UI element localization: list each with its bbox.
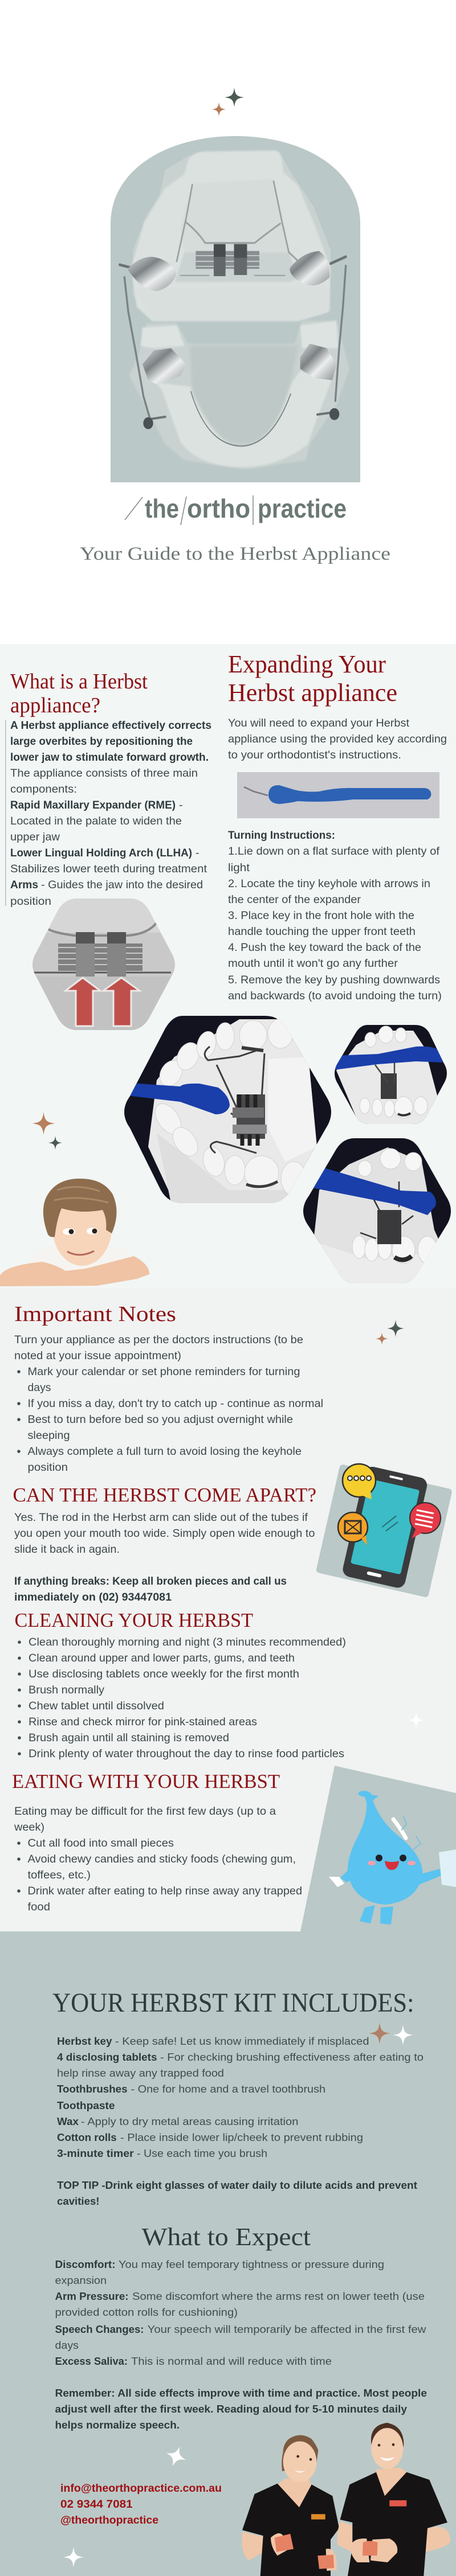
text block: notes list: sleeping	[27, 1429, 70, 1442]
logo: the ortho practice: practice	[258, 494, 347, 523]
heading: CAN THE HERBST COME APART?	[13, 1484, 316, 1506]
photo: expander close-up with arrows	[28, 899, 179, 1031]
icon: bottom white sparkle	[63, 2547, 84, 2567]
panel: what to expect	[55, 2223, 427, 2431]
panel: your Herbst kit includes	[52, 1988, 424, 2207]
sub: blue key	[123, 1082, 230, 1114]
logo: the ortho practice	[125, 494, 347, 525]
text block: turning instructions: mouth until it won't go any further	[228, 957, 398, 970]
text block: intro: appliance using the provided key according	[228, 733, 447, 745]
text block: description: The appliance consists of three main	[10, 767, 198, 780]
text block: description: -	[179, 799, 182, 811]
text block: cleaning list: Brush normally	[28, 1684, 104, 1696]
text block: expectations: Discomfort:	[55, 2258, 115, 2270]
text block: expectations: Some discomfort where the arms rest on lower teeth (use	[132, 2290, 425, 2302]
text block: kit list: help rinse away any trapped food	[57, 2067, 224, 2079]
panel: eating with your Herbst	[12, 1770, 302, 1913]
text block: turning instructions: the center of the expander	[228, 893, 361, 906]
text block: description: components:	[10, 783, 77, 795]
text block: kit list: - Place inside lower lip/cheek to prevent rubbing	[120, 2131, 363, 2143]
text block: answer: Yes. The rod in the Herbst arm can slide out of the tubes if	[14, 1511, 308, 1524]
icon: phone with message bubbles	[314, 1442, 456, 1598]
text block: expectations	[55, 2258, 427, 2431]
text block: answer: you open your mouth too wide. Simply open wide enough to	[14, 1527, 315, 1540]
text block: cleaning list: Use disclosing tablets once weekly for the first month	[28, 1668, 299, 1680]
icon: water drop character on card	[300, 1766, 456, 1931]
text block: eating list: week)	[14, 1821, 44, 1833]
text block: notes list: noted at your issue appointment)	[14, 1349, 181, 1362]
text block: expectations: Your speech will temporarily be affected in the first few	[148, 2323, 426, 2335]
text block: eating list: toffees, etc.)	[27, 1869, 91, 1881]
contact details: @theorthopractice	[60, 2515, 158, 2526]
text block: kit list: - Use each time you brush	[137, 2147, 267, 2159]
text block: description: A Herbst appliance effectively corrects	[10, 719, 211, 732]
sub: right woman	[337, 2423, 450, 2576]
heading: CLEANING YOUR HERBST	[15, 1609, 253, 1631]
text block: kit list: Wax	[57, 2115, 79, 2127]
text block: kit list: 4 disclosing tablets	[57, 2051, 157, 2063]
icon: white sparkle	[408, 1712, 424, 1728]
photo: expansion key	[237, 772, 439, 818]
section: kit background	[0, 1931, 456, 2576]
text block: answer: slide it back in again.	[14, 1543, 120, 1556]
icon: cover sparkles	[212, 88, 244, 116]
text block: turning instructions: 4. Push the key toward the back of the	[228, 941, 421, 954]
text block: kit list: Cotton rolls	[57, 2131, 117, 2143]
text block: turning instructions: 2. Locate the tiny keyhole with arrows in	[228, 877, 430, 890]
text block: turning instructions: Turning Instructions:	[228, 829, 335, 842]
text block: turning instructions: and backwards (to avoid undoing the turn)	[228, 990, 442, 1002]
text block: notes list: days	[27, 1381, 51, 1394]
text block: turning instructions: handle touching the upper front teeth	[228, 925, 416, 938]
text block: description: lower jaw to stimulate forward growth.	[10, 751, 209, 764]
text block: kit list: - Keep safe! Let us know immediately if misplaced	[115, 2035, 369, 2047]
text block: turning instructions: light	[228, 862, 250, 874]
text block: kit list: TOP TIP -Drink eight glasses of water daily to dilute acids and prevent	[57, 2179, 417, 2191]
panel: important notes	[14, 1302, 323, 1474]
photo: Herbst appliance on dental cast	[111, 136, 360, 482]
text block: description: - Guides the jaw into the desired	[41, 879, 203, 891]
text block: answer: immediately on (02) 93447081	[14, 1591, 172, 1603]
heading: YOUR HERBST KIT INCLUDES:	[52, 1988, 414, 2018]
text block: kit list: 3-minute timer	[57, 2147, 134, 2159]
text block: expectations: Remember: All side effects improve with time and practice. Most people	[55, 2387, 427, 2399]
text block: cleaning list: Rinse and check mirror for pink-stained areas	[28, 1716, 257, 1728]
text block: expectations: provided cotton rolls for cushioning)	[55, 2306, 238, 2318]
text block: description	[10, 719, 211, 908]
text block: kit list: Toothbrushes	[57, 2083, 128, 2095]
contact details: info@theorthopractice.com.au	[60, 2483, 222, 2495]
text block: expectations: Arm Pressure:	[55, 2290, 129, 2302]
text block: intro: to your orthodontist's instructions.	[228, 749, 401, 761]
section: notes background	[0, 1288, 456, 1931]
text block: intro: You will need to expand your Herbst	[228, 717, 410, 729]
text block: description: large overbites by repositioning the	[10, 735, 193, 748]
text block: expectations: Speech Changes:	[55, 2323, 144, 2335]
text block: turning instructions: 5. Remove the key by pushing downwards	[228, 974, 440, 986]
text block: description: -	[196, 847, 199, 859]
photo: key inserted, large view	[117, 1016, 339, 1204]
text block: notes list: Mark your calendar or set phone reminders for turning	[27, 1365, 300, 1378]
text block: cleaning list: Clean around upper and lower parts, gums, and teeth	[28, 1652, 295, 1664]
text block: description: Arms	[10, 879, 38, 891]
heading: Expanding Your	[228, 650, 386, 678]
text block: expectations: This is normal and will reduce with time	[131, 2355, 332, 2367]
text block: cleaning list: Chew tablet until dissolved	[28, 1700, 164, 1712]
text block: description: upper jaw	[10, 831, 60, 843]
text block: eating list	[14, 1805, 302, 1913]
text block: eating list: food	[27, 1901, 50, 1913]
text block: notes list	[14, 1334, 323, 1474]
text block: cleaning list: Drink plenty of water throughout the day to rinse food particles	[28, 1748, 344, 1760]
text block: answer: If anything breaks: Keep all broken pieces and call us	[14, 1575, 287, 1588]
heading: EATING WITH YOUR HERBST	[12, 1770, 280, 1792]
text block: turning instructions: 1.Lie down on a flat surface with plenty of	[228, 845, 440, 858]
text block: kit list: Toothpaste	[57, 2099, 115, 2111]
photo: smiling boy	[0, 1179, 149, 1286]
sub: wires	[120, 181, 346, 446]
text block: expectations: Excess Saliva:	[55, 2355, 128, 2367]
text block: eating list: Cut all food into small pieces	[27, 1837, 174, 1849]
text block: cleaning list	[18, 1636, 346, 1760]
text block: eating list: Drink water after eating to help rinse away any trapped	[27, 1885, 302, 1897]
icon: notes sparkles	[376, 1320, 404, 1345]
text block: notes list: Best to turn before bed so you adjust overnight while	[27, 1413, 293, 1426]
photo: key at front of mouth	[299, 1138, 453, 1284]
section: information background	[0, 644, 456, 1288]
text block: eating list: Avoid chewy candies and sticky foods (chewing gum,	[27, 1853, 296, 1865]
text block: answer	[14, 1511, 315, 1603]
panel: can the Herbst come apart	[13, 1484, 316, 1603]
icon: kit sparkles	[369, 2023, 413, 2045]
text block: description: Lower Lingual Holding Arch (LLHA)	[10, 847, 192, 859]
text block: kit list: - One for home and a travel toothbrush	[131, 2083, 325, 2095]
title: Your Guide to the Herbst Appliance	[80, 544, 390, 564]
text block: notes list: If you miss a day, don't try to catch up - continue as normal	[27, 1397, 323, 1410]
contact details: 02 9344 7081	[60, 2499, 133, 2511]
photo: key from above	[331, 1025, 450, 1125]
panel: expanding your Herbst appliance	[228, 650, 447, 1002]
panel: what is a Herbst appliance	[5, 670, 211, 908]
heading: What is a Herbst	[10, 670, 148, 694]
text block: eating list: Eating may be difficult for the first few days (up to a	[14, 1805, 276, 1818]
icon: left sparkles	[32, 1112, 62, 1150]
text block: expectations: days	[55, 2339, 79, 2351]
sub: expander screw	[196, 244, 259, 276]
sub: left woman	[242, 2435, 339, 2576]
text block: notes list: Always complete a full turn to avoid losing the keyhole	[27, 1445, 302, 1458]
text block: kit list	[57, 2035, 424, 2207]
text block: description: Located in the palate to widen the	[10, 815, 182, 827]
text block: description: position	[10, 895, 51, 908]
text block: cleaning list: Clean thoroughly morning and night (3 minutes recommended)	[28, 1636, 346, 1648]
heading	[228, 650, 397, 707]
text block: description: Stabilizes lower teeth during treatment	[10, 863, 207, 875]
text block: kit list: Herbst key	[57, 2035, 112, 2047]
text block: expectations: You may feel temporary tightness or pressure during	[119, 2258, 384, 2270]
text block: turning instructions: 3. Place key in the front hole with the	[228, 909, 414, 922]
text block: expectations: adjust well after the first week. Reading aloud for 5-10 minutes daily	[55, 2403, 408, 2415]
heading: appliance?	[10, 694, 100, 717]
icon: rotated white sparkle	[163, 2443, 189, 2470]
sub: molar bands	[128, 251, 336, 385]
text block: cleaning list: Brush again until all staining is removed	[28, 1732, 229, 1744]
sub: red arrows	[66, 978, 140, 1026]
logo: the ortho practice: ortho	[187, 494, 250, 523]
logo: the ortho practice: the	[145, 494, 179, 523]
text block: kit list: - For checking brushing effectiveness after eating to	[160, 2051, 424, 2063]
heading: What to Expect	[141, 2223, 311, 2251]
text block: description: Rapid Maxillary Expander (RME)	[10, 799, 176, 811]
text block: intro	[228, 717, 447, 761]
heading	[10, 670, 148, 717]
section: cover background	[0, 0, 456, 644]
heading: Important Notes	[14, 1302, 176, 1326]
contact details	[60, 2483, 222, 2526]
text block: kit list: cavities!	[57, 2195, 99, 2207]
text block: notes list: Turn your appliance as per the doctors instructions (to be	[14, 1334, 303, 1346]
photo: two orthodontic staff members	[242, 2423, 450, 2576]
text block: kit list: - Apply to dry metal areas causing irritation	[81, 2115, 299, 2127]
heading: Herbst appliance	[228, 679, 397, 707]
text block: expectations: expansion	[55, 2274, 107, 2286]
text block: notes list: position	[27, 1461, 68, 1474]
panel: cleaning your Herbst	[15, 1609, 346, 1760]
text block: expectations: helps normalize speech.	[55, 2419, 180, 2431]
text block: turning instructions	[228, 829, 442, 1002]
